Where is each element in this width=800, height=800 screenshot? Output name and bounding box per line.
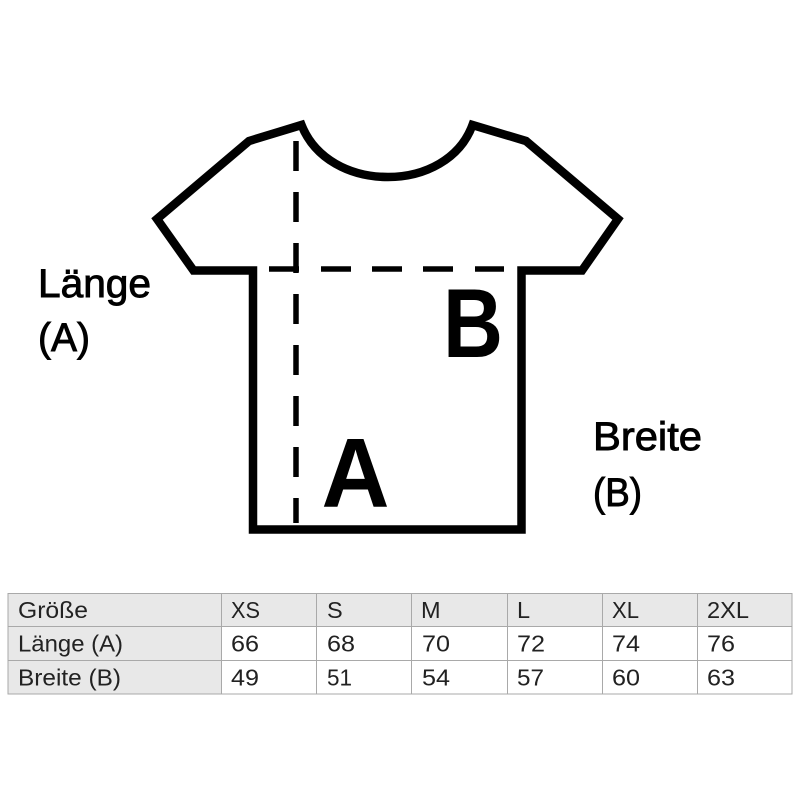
- table row: Länge (A): 66: [231, 630, 259, 656]
- dashed line: width B: [269, 266, 504, 272]
- table row: Breite (B): 49: [231, 664, 259, 690]
- table row: Größe: M: [421, 597, 441, 623]
- label: Breite (B): [593, 415, 702, 515]
- table row: Länge (A): Länge (A): [18, 630, 123, 656]
- table shaded first column: [8, 627, 221, 694]
- table row: Länge (A): 68: [327, 630, 355, 656]
- table row: Größe: XS: [231, 597, 260, 623]
- table row: Breite (B): 63: [707, 664, 735, 690]
- size table: [8, 593, 792, 694]
- table row: Breite (B): Breite (B): [18, 664, 121, 690]
- label: Länge (A): [38, 262, 151, 360]
- table row: Breite (B): 60: [612, 664, 640, 690]
- table row: Länge (A): 76: [707, 630, 735, 656]
- icon: t-shirt outline: [157, 125, 618, 530]
- table row: Größe: S: [327, 597, 343, 623]
- table row: Länge (A): 72: [517, 630, 545, 656]
- letter A on shirt: A: [322, 418, 390, 528]
- table row: Größe: 2XL: [707, 597, 749, 623]
- table row: Länge (A): 74: [612, 630, 640, 656]
- table row: Länge (A): 70: [422, 630, 450, 656]
- table shaded header row: [8, 593, 792, 627]
- label: Länge (A): (A): [38, 316, 90, 360]
- label: Breite (B): (B): [593, 471, 642, 515]
- table row: Größe: [18, 597, 749, 623]
- table row: Breite (B): 54: [422, 664, 450, 690]
- table row: Größe: L: [517, 597, 530, 623]
- table row: Größe: Größe: [18, 597, 88, 623]
- table row: Breite (B): 51: [327, 664, 352, 690]
- label: Länge (A): Länge: [38, 262, 151, 306]
- dashed line: length A: [293, 141, 299, 523]
- letter B on shirt: B: [443, 268, 503, 378]
- table row: Größe: XL: [612, 597, 639, 623]
- table grid: [8, 593, 792, 694]
- table row: Breite (B): [18, 664, 735, 690]
- table row: Länge (A): [18, 630, 735, 656]
- label: Breite (B): Breite: [593, 415, 702, 459]
- table row: Breite (B): 57: [517, 664, 544, 690]
